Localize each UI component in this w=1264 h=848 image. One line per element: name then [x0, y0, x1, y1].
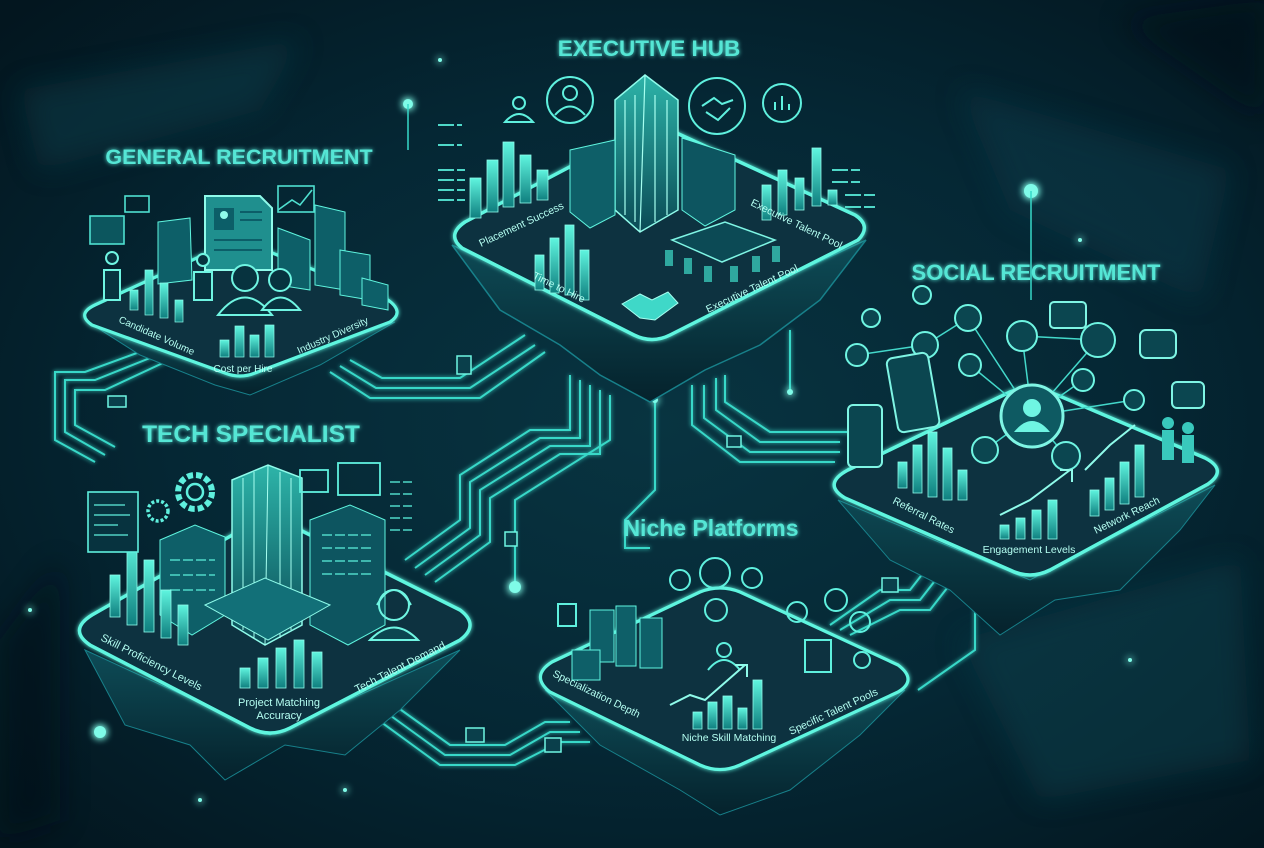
chart: engagement levels [1000, 500, 1057, 539]
chart: referral rates [898, 432, 967, 500]
platform rock [452, 240, 866, 402]
people shaking hands [1162, 417, 1194, 463]
connector: tech specialist to executive hub [405, 375, 610, 585]
chart: skill proficiency levels [110, 540, 188, 645]
platform rock [88, 322, 395, 395]
icon: support agent [370, 590, 418, 640]
platform rock [545, 690, 905, 815]
phones and chat bubbles [848, 302, 1204, 467]
chart: placement success bars [470, 142, 548, 218]
panel: social recruitment [834, 260, 1217, 635]
connector: executive hub to social recruitment [625, 330, 850, 548]
label: industry diversity: Industry Diversity [296, 316, 370, 357]
label: project matching accuracy: Accuracy [256, 710, 302, 722]
connector: niche platforms to social recruitment [830, 545, 975, 690]
tower [570, 75, 735, 232]
chart: candidate volume [130, 270, 183, 322]
niche icons [558, 558, 870, 672]
chart: executive talent pool bars [762, 148, 837, 220]
dialog icons [90, 186, 314, 244]
trend arrows [1000, 425, 1135, 515]
heading: tech specialist: TECH SPECIALIST [142, 421, 360, 448]
server towers [160, 465, 385, 645]
people silhouettes [104, 252, 300, 315]
label: referral rates: Referral Rates [891, 495, 956, 536]
icon: boardroom table [665, 222, 780, 282]
side lists [438, 125, 875, 207]
heading: executive hub: EXECUTIVE HUB [558, 36, 740, 61]
social network [857, 318, 1134, 456]
icons: executive row [505, 77, 801, 134]
connector chips [108, 356, 898, 752]
platform top [79, 520, 470, 733]
icon: handshake [622, 292, 678, 320]
panel: niche platforms [540, 515, 908, 815]
panel: general recruitment [85, 145, 397, 395]
label: executive talent pool upper: Executive Talent Pool [749, 197, 844, 252]
panel: executive hub [438, 36, 875, 402]
connector: general recruitment to executive hub [330, 335, 545, 398]
label: candidate volume: Candidate Volume [117, 315, 196, 358]
platform rock [85, 650, 460, 780]
label: executive talent pool lower: Executive Talent Pool [704, 262, 800, 316]
server text lines [170, 482, 412, 590]
chart: cost per hire [220, 325, 274, 357]
label: skill proficiency levels: Skill Proficiency Levels [99, 632, 204, 694]
label: niche skill matching: Niche Skill Matching [682, 732, 776, 744]
label: network reach: Network Reach [1092, 494, 1162, 537]
document icon [205, 196, 272, 270]
label: specialization depth: Specialization Depth [551, 668, 642, 721]
trend arrow [670, 665, 747, 705]
chart: time to hire bars [535, 225, 589, 300]
connector: general recruitment to tech specialist [55, 350, 165, 462]
platform top [834, 388, 1217, 575]
label: specific talent pools: Specific Talent Pools [787, 686, 880, 738]
central person [1001, 385, 1063, 447]
chart: network reach [1090, 445, 1144, 516]
chart: project matching accuracy [240, 640, 322, 688]
platform top [540, 588, 908, 770]
platform top [85, 243, 397, 376]
city buildings [158, 205, 388, 310]
heading: general recruitment: GENERAL RECRUITMENT [105, 145, 373, 169]
label: project matching accuracy: Project Matching [238, 697, 320, 709]
label: cost per hire: Cost per Hire [214, 364, 273, 375]
connector: tech specialist to niche platforms [370, 702, 590, 765]
chart: niche skill matching [693, 680, 762, 729]
connector circuits [55, 330, 975, 765]
niche city [572, 606, 662, 680]
icon: gear and windows [88, 463, 380, 552]
platform top [455, 127, 864, 340]
label: time to hire: Time to Hire [531, 270, 587, 306]
platform rock [838, 485, 1215, 635]
panel: tech specialist [79, 421, 470, 780]
glowing nodes [28, 58, 1132, 802]
heading: niche platforms: Niche Platforms [623, 515, 799, 541]
label: tech talent demand: Tech Talent Demand [353, 640, 448, 696]
label: engagement levels: Engagement Levels [983, 544, 1075, 556]
heading: social recruitment: SOCIAL RECRUITMENT [912, 260, 1161, 285]
label: placement success: Placement Success [477, 200, 566, 250]
